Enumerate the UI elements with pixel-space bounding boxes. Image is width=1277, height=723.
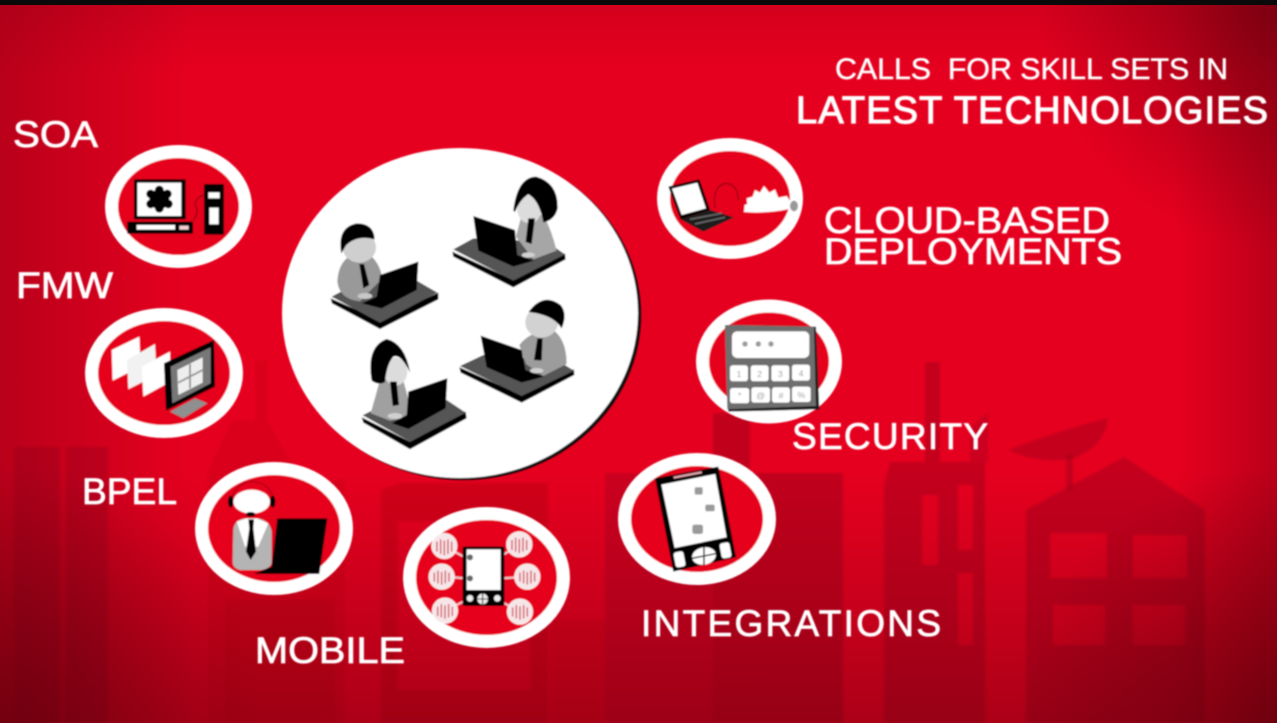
network nodes xyxy=(429,532,540,624)
ring icon: SECURITY keypad: * xyxy=(738,391,742,401)
label: MOBILE: MOBILE xyxy=(255,630,405,671)
ring icon: SECURITY keypad xyxy=(702,306,836,417)
ring icon: INTEGRATIONS handheld device xyxy=(624,460,770,578)
label: cloud-based deployments: CLOUD-BASED xyxy=(824,200,1110,241)
label: cloud-based deployments xyxy=(824,200,1122,272)
ring icon: SECURITY keypad: # xyxy=(779,391,784,401)
ring icon: MOBILE phone with connected nodes xyxy=(410,514,564,642)
ring icon: SECURITY keypad: 4 xyxy=(799,368,804,378)
label: INTEGRATIONS: INTEGRATIONS xyxy=(641,603,941,644)
worker: woman top right xyxy=(452,177,566,287)
label: SECURITY: SECURITY xyxy=(792,416,988,457)
heading: CALLS FOR SKILL SETS IN xyxy=(835,53,1228,86)
worker: man top left xyxy=(331,223,438,329)
worker: man lower right xyxy=(459,300,574,403)
top black bar xyxy=(0,0,1277,5)
city skyline silhouette xyxy=(14,360,1205,723)
ring icon: SECURITY keypad: 1 xyxy=(737,369,742,379)
ring icon: SECURITY keypad: % xyxy=(797,390,805,400)
label: FMW: FMW xyxy=(16,265,113,306)
ring icon: SOA computer xyxy=(112,152,246,262)
central white circle with four workers xyxy=(282,148,641,480)
worker: woman lower left xyxy=(362,339,467,449)
illustration group xyxy=(92,144,836,642)
ring icon: FMW pages and monitor xyxy=(92,314,236,432)
heading: LATEST TECHNOLOGIES xyxy=(796,90,1268,132)
label: SOA: SOA xyxy=(13,114,98,155)
ring icon: BPEL person with headset and laptop xyxy=(202,468,346,588)
heading xyxy=(796,53,1268,132)
ring icon: SECURITY keypad: 2 xyxy=(757,369,762,379)
ring icon: SECURITY keypad: 3 xyxy=(778,369,783,379)
ring icon: cloud-based laptop and cloud xyxy=(664,144,798,252)
label: BPEL: BPEL xyxy=(82,471,177,512)
label: cloud-based deployments: DEPLOYMENTS xyxy=(824,231,1122,272)
ring icon: SECURITY keypad: @ xyxy=(756,391,765,401)
